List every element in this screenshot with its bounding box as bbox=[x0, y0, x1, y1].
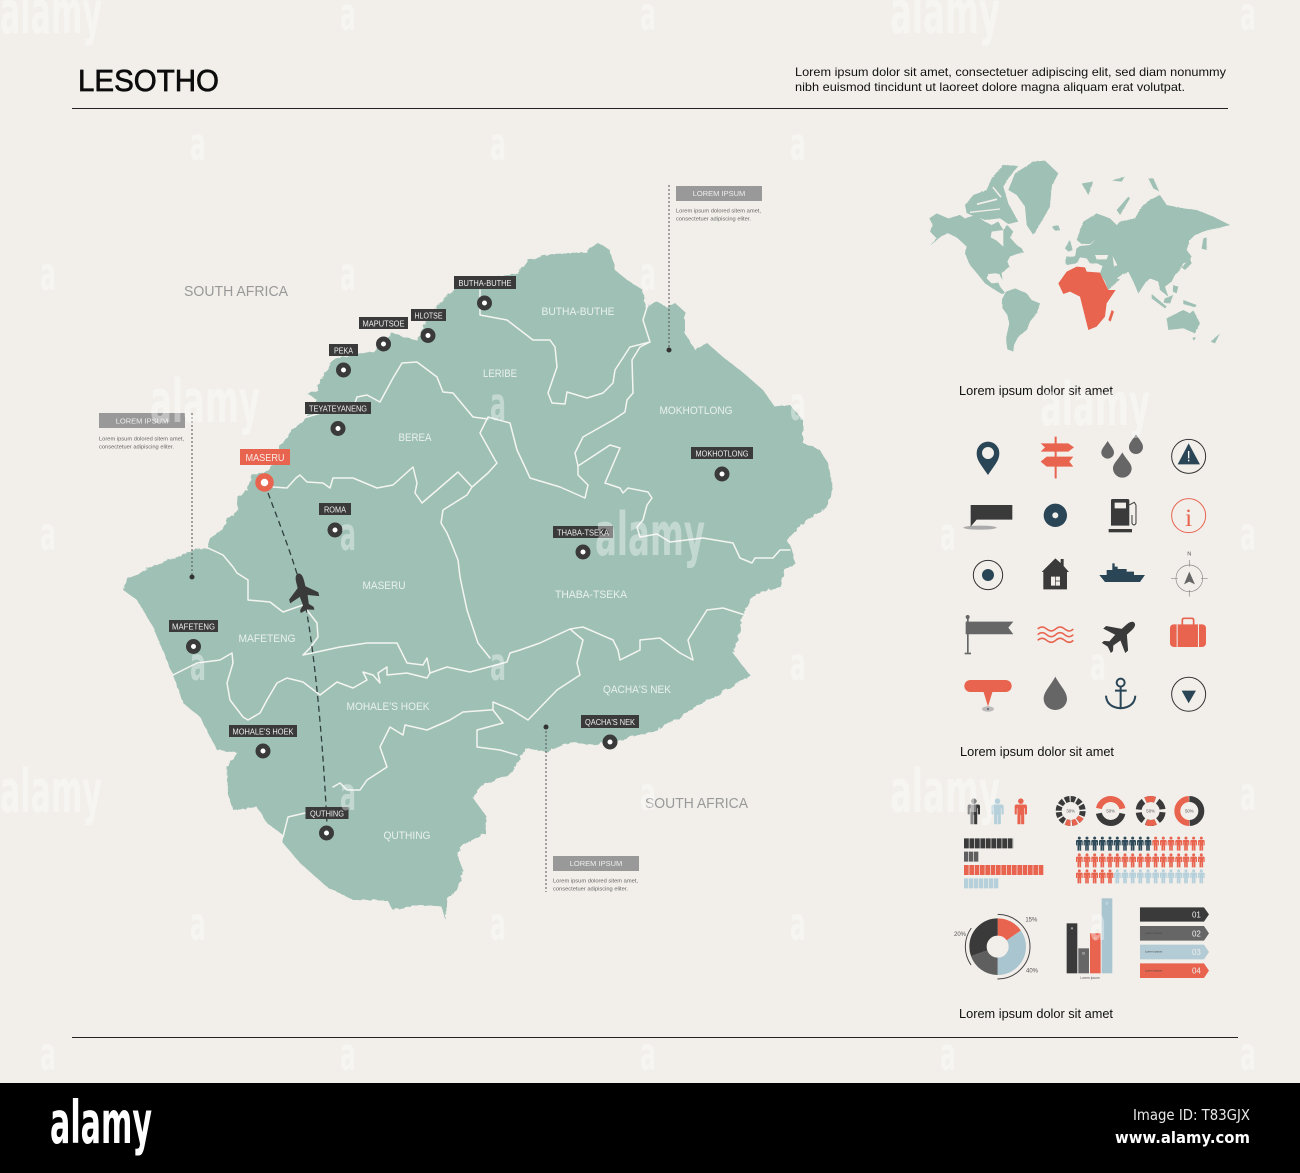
watermarks: a bbox=[40, 508, 56, 561]
city: Quthing: QUTHING bbox=[310, 810, 344, 818]
icon: plane bbox=[1095, 610, 1145, 660]
icon: ship bbox=[1099, 563, 1145, 582]
ribbon list: 03 bbox=[1192, 948, 1201, 957]
watermarks: a bbox=[490, 118, 506, 171]
icon: location pin bbox=[977, 442, 999, 475]
city: Roma: ROMA bbox=[324, 506, 347, 514]
region labels: QACHA'S NEK bbox=[603, 684, 672, 696]
bar chart: Lorem ipsum bbox=[1080, 976, 1100, 980]
heading: icons: Lorem ipsum dolor sit amet bbox=[960, 745, 1115, 759]
region labels: MOKHOTLONG bbox=[660, 405, 732, 417]
city: Maputsoe: MAPUTSOE bbox=[362, 320, 404, 328]
flight path bbox=[268, 493, 327, 825]
icon: speech bubble bbox=[963, 505, 1012, 530]
watermarks: alamy bbox=[890, 757, 1000, 827]
ribbon list: Lorem ipsum bbox=[1145, 969, 1163, 973]
region labels: BEREA bbox=[398, 432, 432, 444]
region labels bbox=[238, 306, 732, 842]
city: Peka: PEKA bbox=[334, 346, 354, 356]
icon: drop bbox=[1044, 677, 1067, 710]
region labels: MAFETENG bbox=[238, 633, 296, 645]
icon: suitcase bbox=[1170, 618, 1206, 647]
watermarks: a bbox=[940, 1028, 956, 1081]
city: Roma bbox=[319, 503, 351, 535]
intro text bbox=[795, 65, 1226, 94]
footer logo: alamy bbox=[50, 1088, 152, 1157]
watermarks: a bbox=[790, 898, 806, 951]
pie chart: 40% bbox=[1026, 968, 1039, 974]
region labels: BUTHA-BUTHE bbox=[542, 306, 614, 318]
continents bbox=[929, 161, 1230, 352]
city: Thaba-Tseka: THABA-TSEKA bbox=[557, 528, 610, 538]
icon: fuel pump bbox=[1109, 499, 1136, 532]
bar chart: A bbox=[1071, 926, 1074, 930]
heading: charts: Lorem ipsum dolor sit amet bbox=[959, 1007, 1114, 1021]
ribbon list bbox=[1140, 907, 1209, 978]
watermarks: alamy bbox=[0, 757, 102, 827]
watermarks: a bbox=[340, 508, 356, 561]
callout: north: consectetuer adipiscing eliter. bbox=[676, 216, 751, 222]
watermarks: alamy bbox=[1040, 370, 1150, 440]
callout: west: Lorem ipsum dolored sitem amet, bbox=[99, 436, 184, 442]
watermarks: a bbox=[640, 248, 656, 301]
infographic: people and donuts bbox=[964, 795, 1205, 883]
city: Teyateyaneng bbox=[305, 402, 371, 434]
icon: down arrow bbox=[1172, 677, 1206, 711]
lakes and seas bbox=[970, 187, 1117, 267]
title: LESOTHO bbox=[78, 63, 219, 98]
neighbour label: South Africa south: SOUTH AFRICA bbox=[645, 795, 748, 812]
callout: west bbox=[99, 413, 194, 580]
watermarks: a bbox=[40, 248, 56, 301]
donut charts: 30% bbox=[1066, 809, 1075, 814]
ribbon list: Lorem ipsum bbox=[1145, 931, 1163, 935]
region labels: LERIBE bbox=[483, 368, 517, 380]
icon: water drops bbox=[1101, 434, 1143, 478]
city: Hlotse: HLOTSE bbox=[414, 312, 442, 320]
pie chart: 20% bbox=[954, 932, 967, 938]
icon: target bbox=[973, 560, 1003, 590]
watermarks: a bbox=[1090, 898, 1106, 951]
city: Maputsoe bbox=[359, 317, 408, 349]
country shape bbox=[123, 243, 833, 920]
icon: compass bbox=[1171, 552, 1208, 597]
callout: south: consectetuer adipiscing eliter. bbox=[553, 886, 628, 892]
district borders bbox=[173, 290, 790, 837]
icon: warning bbox=[1172, 439, 1206, 473]
city: Quthing bbox=[306, 807, 348, 838]
icon set bbox=[963, 434, 1208, 712]
footer band bbox=[0, 1083, 1300, 1173]
icon: flag bbox=[965, 615, 1013, 654]
city: Qacha's Nek: QACHA'S NEK bbox=[585, 718, 636, 727]
city: Thaba-Tseka bbox=[553, 526, 613, 557]
watermarks: a bbox=[790, 378, 806, 431]
watermarks: a bbox=[790, 638, 806, 691]
city: Mokhotlong bbox=[691, 447, 753, 479]
watermarks: alamy bbox=[595, 500, 705, 570]
pie chart: 15% bbox=[1025, 917, 1038, 923]
icon: anchor bbox=[1106, 679, 1135, 708]
watermarks: a bbox=[640, 768, 656, 821]
icon: map marker bbox=[964, 680, 1012, 712]
watermarks: a bbox=[490, 898, 506, 951]
ribbon list: 04 bbox=[1192, 967, 1201, 976]
watermarks: a bbox=[190, 638, 206, 691]
ribbon list: Lorem ipsum bbox=[1145, 950, 1163, 954]
intro text: Lorem ipsum dolor sit amet, consectetuer adipiscing elit, sed diam nonummy bbox=[795, 65, 1226, 79]
callout: west: LOREM IPSUM bbox=[116, 416, 168, 426]
pie chart bbox=[954, 914, 1039, 979]
icon: house bbox=[1042, 558, 1069, 589]
watermarks: a bbox=[1240, 508, 1256, 561]
header rule bbox=[72, 108, 1228, 109]
watermarks: a bbox=[190, 118, 206, 171]
bar chart: B bbox=[1082, 951, 1085, 955]
bar chart: C bbox=[1094, 936, 1097, 940]
city: Qacha's Nek bbox=[581, 715, 639, 747]
map: Lesotho bbox=[123, 243, 833, 920]
watermarks: a bbox=[340, 768, 356, 821]
watermarks: alamy bbox=[150, 367, 260, 437]
region labels: QUTHING bbox=[384, 830, 430, 842]
region labels: MOHALE'S HOEK bbox=[346, 701, 430, 713]
intro text: nibh euismod tincidunt ut laoreet dolore magna aliquam erat volutpat. bbox=[795, 80, 1185, 94]
heading: world map: Lorem ipsum dolor sit amet bbox=[959, 384, 1114, 398]
segmented bars bbox=[964, 843, 1043, 883]
city: Maseru (capital) bbox=[240, 449, 290, 489]
watermarks: a bbox=[40, 1028, 56, 1081]
people icons bbox=[968, 798, 1027, 824]
bar chart bbox=[1067, 898, 1112, 980]
city: Teyateyaneng: TEYATEYANENG bbox=[309, 404, 367, 414]
icon: signpost bbox=[1041, 437, 1074, 478]
icon: info bbox=[1172, 499, 1206, 533]
watermarks: a bbox=[190, 898, 206, 951]
world map bbox=[929, 161, 1230, 352]
footer rule bbox=[72, 1037, 1238, 1038]
watermarks: a bbox=[1240, 1028, 1256, 1081]
callout: south: Lorem ipsum dolored sitem amet, bbox=[553, 878, 638, 884]
watermarks: a bbox=[490, 638, 506, 691]
icon: compass: N bbox=[1187, 552, 1191, 558]
watermarks: a bbox=[490, 378, 506, 431]
donut charts: 50% bbox=[1106, 809, 1115, 814]
icon: plane on map bbox=[284, 570, 322, 615]
donut charts: 50% bbox=[1185, 809, 1194, 814]
city: Butha-Buthe: BUTHA-BUTHE bbox=[458, 279, 512, 288]
city: Peka bbox=[329, 344, 358, 375]
city: Mokhotlong: MOKHOTLONG bbox=[696, 450, 748, 458]
neighbour label: South Africa north: SOUTH AFRICA bbox=[184, 283, 288, 300]
city: Mafeteng bbox=[169, 620, 218, 652]
callout: south bbox=[544, 724, 639, 892]
watermarks: a bbox=[640, 1028, 656, 1081]
watermarks: a bbox=[1240, 768, 1256, 821]
image id: Image ID: T83GJX bbox=[1133, 1106, 1250, 1124]
callout: north bbox=[666, 185, 762, 352]
icon: info: i bbox=[1185, 504, 1192, 532]
infographic: charts bbox=[954, 898, 1209, 980]
watermarks: a bbox=[790, 118, 806, 171]
ribbon list: 02 bbox=[1192, 929, 1201, 938]
region labels: MASERU bbox=[362, 580, 406, 592]
callout: north: Lorem ipsum dolored sitem amet, bbox=[676, 208, 761, 214]
site url: www.alamy.com bbox=[1115, 1128, 1250, 1147]
city: Mohale's Hoek bbox=[229, 725, 297, 756]
Africa highlighted bbox=[1058, 267, 1116, 330]
watermarks: a bbox=[340, 248, 356, 301]
callout: west: consectetuer adipiscing eliter. bbox=[99, 444, 174, 450]
watermarks: a bbox=[940, 508, 956, 561]
callout: south: LOREM IPSUM bbox=[570, 859, 622, 868]
bar chart: D bbox=[1106, 901, 1109, 905]
region labels: THABA-TSEKA bbox=[555, 589, 628, 601]
city: Hlotse bbox=[411, 309, 446, 340]
callout: north: LOREM IPSUM bbox=[693, 189, 745, 198]
city: Mohale's Hoek: MOHALE'S HOEK bbox=[232, 728, 294, 736]
people grid bbox=[1076, 837, 1205, 883]
city: Maseru (capital): MASERU bbox=[246, 453, 284, 464]
city: Butha-Buthe bbox=[454, 276, 516, 308]
ribbon list: 01 bbox=[1192, 910, 1201, 919]
donut charts bbox=[1054, 795, 1201, 827]
donut charts: 50% bbox=[1146, 809, 1155, 814]
watermarks: a bbox=[340, 1028, 356, 1081]
icon: waves bbox=[1038, 627, 1073, 642]
city: Mafeteng: MAFETENG bbox=[172, 622, 215, 632]
watermarks: a bbox=[1090, 638, 1106, 691]
icon: disc bbox=[1044, 504, 1067, 527]
